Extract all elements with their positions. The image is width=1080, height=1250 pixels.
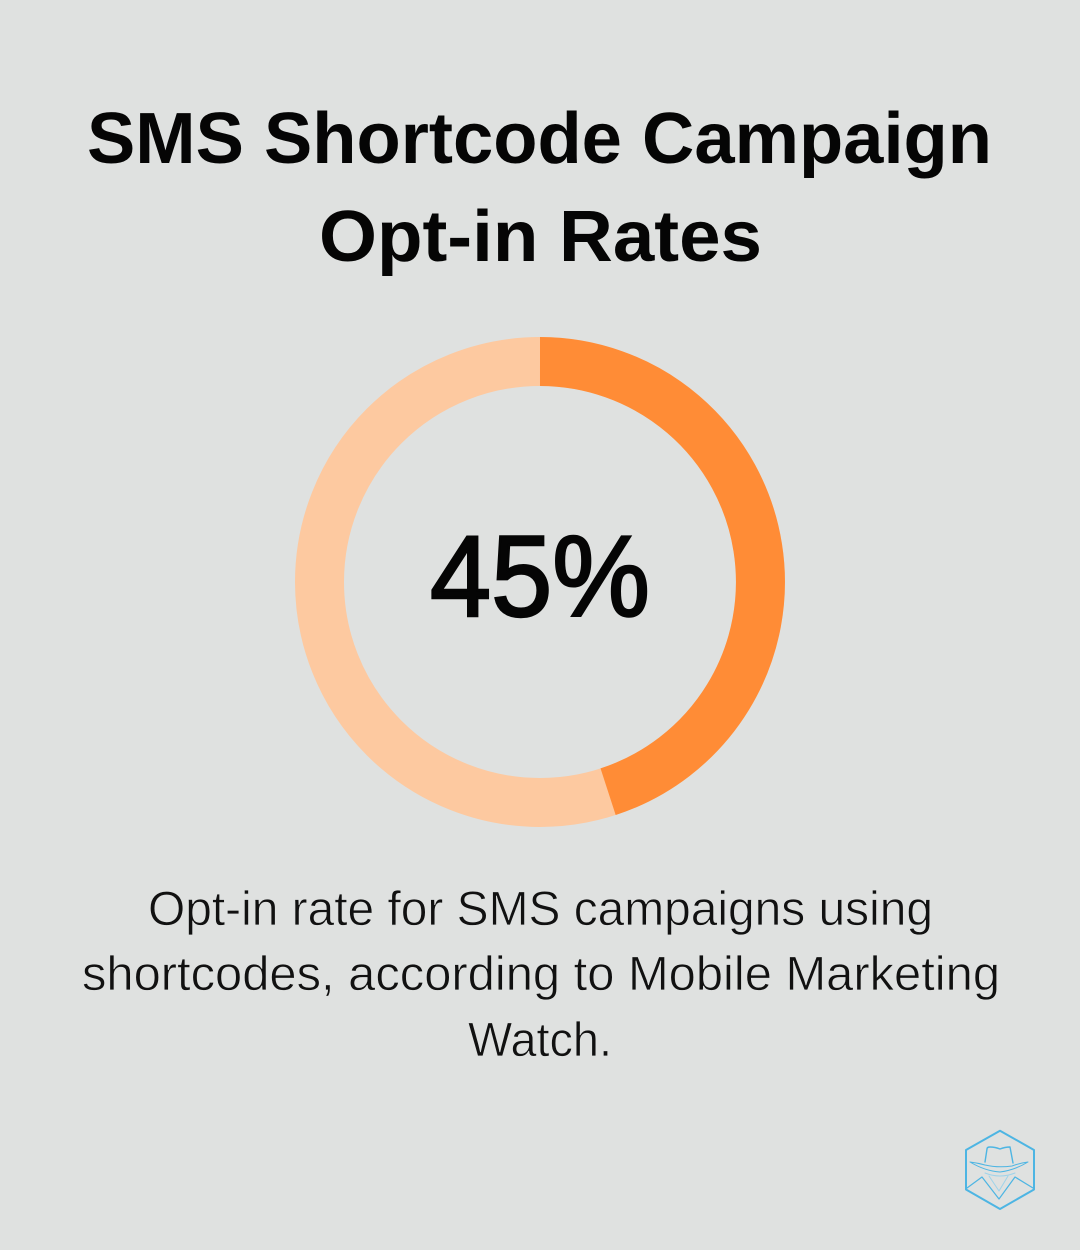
- big number: 45%: [430, 513, 650, 641]
- icon: logo hexagon with spy hat: [966, 1131, 1034, 1209]
- description text: [82, 883, 1000, 1067]
- title: Opt-in Rates: [319, 197, 762, 277]
- title: [87, 99, 992, 277]
- donut chart: 45%: [320, 362, 760, 802]
- description text: shortcodes, according to Mobile Marketing: [82, 948, 1000, 1001]
- description text: Opt-in rate for SMS campaigns using: [148, 883, 933, 936]
- title: SMS Shortcode Campaign: [87, 99, 992, 179]
- description text: Watch.: [468, 1014, 612, 1067]
